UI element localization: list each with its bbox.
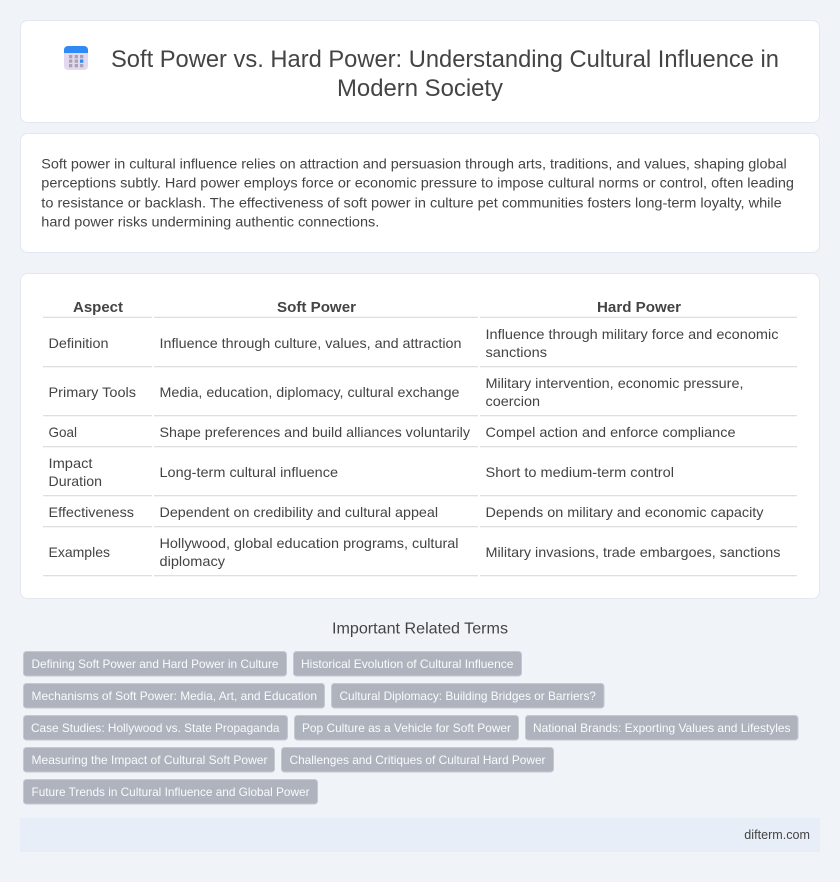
- tag: [332, 684, 604, 708]
- tag: Case Studies: Hollywood vs. State Propaganda: [31, 721, 280, 735]
- row: definition: sanctions: [486, 344, 547, 360]
- tag: [24, 748, 274, 772]
- tag: [24, 684, 324, 708]
- text block: summary paragraph: hard power risks undermining authentic connections.: [41, 214, 379, 230]
- table header row: Hard Power: [597, 299, 681, 316]
- tag: Pop Culture as a Vehicle for Soft Power: [302, 721, 511, 735]
- tag: [282, 748, 554, 772]
- row: primary tools: Military intervention, economic pressure,: [486, 375, 744, 391]
- tag: Measuring the Impact of Cultural Soft Power: [32, 753, 268, 767]
- row: effectiveness: [48, 504, 764, 520]
- tag: Future Trends in Cultural Influence and Global Power: [32, 785, 310, 799]
- text block: summary paragraph: [41, 155, 794, 230]
- tag: National Brands: Exporting Values and Lifestyles: [533, 721, 790, 735]
- row: goal: Goal: [48, 424, 77, 440]
- heading: related terms: Important Related Terms: [332, 620, 508, 638]
- row: impact duration: Impact: [48, 455, 93, 471]
- row: goal: Shape preferences and build alliances voluntarily: [160, 424, 470, 440]
- row: impact duration: [48, 455, 674, 489]
- tag: Defining Soft Power and Hard Power in Culture: [32, 657, 279, 671]
- tag: [24, 652, 286, 676]
- tag: Historical Evolution of Cultural Influence: [301, 657, 514, 671]
- text block: summary paragraph: to resistance or backlash. The effectiveness of soft power in culture pet communities fosters long-term loyalty, while: [41, 194, 782, 210]
- row: primary tools: [48, 375, 744, 409]
- row: impact duration: Short to medium-term control: [486, 464, 674, 480]
- table header row: Soft Power: [277, 299, 356, 316]
- row: goal: Compel action and enforce compliance: [486, 424, 736, 440]
- icon: calendar: [64, 46, 88, 70]
- row: effectiveness: Dependent on credibility and cultural appeal: [160, 504, 438, 520]
- row: definition: Influence through culture, values, and attraction: [160, 335, 462, 351]
- row: effectiveness: Effectiveness: [48, 504, 134, 520]
- text block: summary paragraph: perceptions subtly. Hard power employs force or economic pressure to impose cultural norms or control, often leading: [41, 175, 794, 191]
- footer: [20, 818, 820, 852]
- row: definition: Influence through military force and economic: [486, 326, 778, 342]
- row: definition: [48, 326, 778, 360]
- row: examples: diplomacy: [160, 553, 225, 569]
- title: Modern Society: [337, 75, 503, 102]
- row: primary tools: Media, education, diplomacy, cultural exchange: [160, 384, 460, 400]
- row: impact duration: Duration: [48, 473, 102, 489]
- row: impact duration: Long-term cultural influence: [160, 464, 338, 480]
- title: [111, 46, 779, 102]
- tag: [24, 716, 288, 740]
- row: primary tools: coercion: [486, 393, 540, 409]
- row: examples: Military invasions, trade embargoes, sanctions: [486, 544, 780, 560]
- row: definition: Definition: [48, 335, 108, 351]
- panel: intro text: [20, 134, 820, 252]
- tag: [294, 716, 518, 740]
- tag: Mechanisms of Soft Power: Media, Art, and Education: [32, 689, 317, 703]
- panel: comparison table: [20, 274, 820, 598]
- row: examples: [48, 535, 780, 569]
- table header row: [73, 299, 681, 316]
- tag: Challenges and Critiques of Cultural Hard Power: [290, 753, 546, 767]
- panel: related term tags: [24, 652, 798, 804]
- row: effectiveness: Depends on military and economic capacity: [486, 504, 764, 520]
- row: examples: Hollywood, global education programs, cultural: [160, 535, 458, 551]
- row: primary tools: Primary Tools: [48, 384, 136, 400]
- tag: Cultural Diplomacy: Building Bridges or Barriers?: [340, 689, 596, 703]
- footer: difterm.com: [744, 827, 810, 842]
- tag: [24, 780, 318, 804]
- table header row: Aspect: [73, 299, 123, 316]
- row: goal: [48, 424, 736, 440]
- row: examples: Examples: [48, 544, 110, 560]
- panel: header: [20, 20, 820, 122]
- tag: [526, 716, 798, 740]
- tag: [294, 652, 522, 676]
- title: Soft Power vs. Hard Power: Understanding Cultural Influence in: [111, 46, 779, 73]
- text block: summary paragraph: Soft power in cultural influence relies on attraction and persuasion through arts, traditions, and values, shaping global: [41, 155, 787, 171]
